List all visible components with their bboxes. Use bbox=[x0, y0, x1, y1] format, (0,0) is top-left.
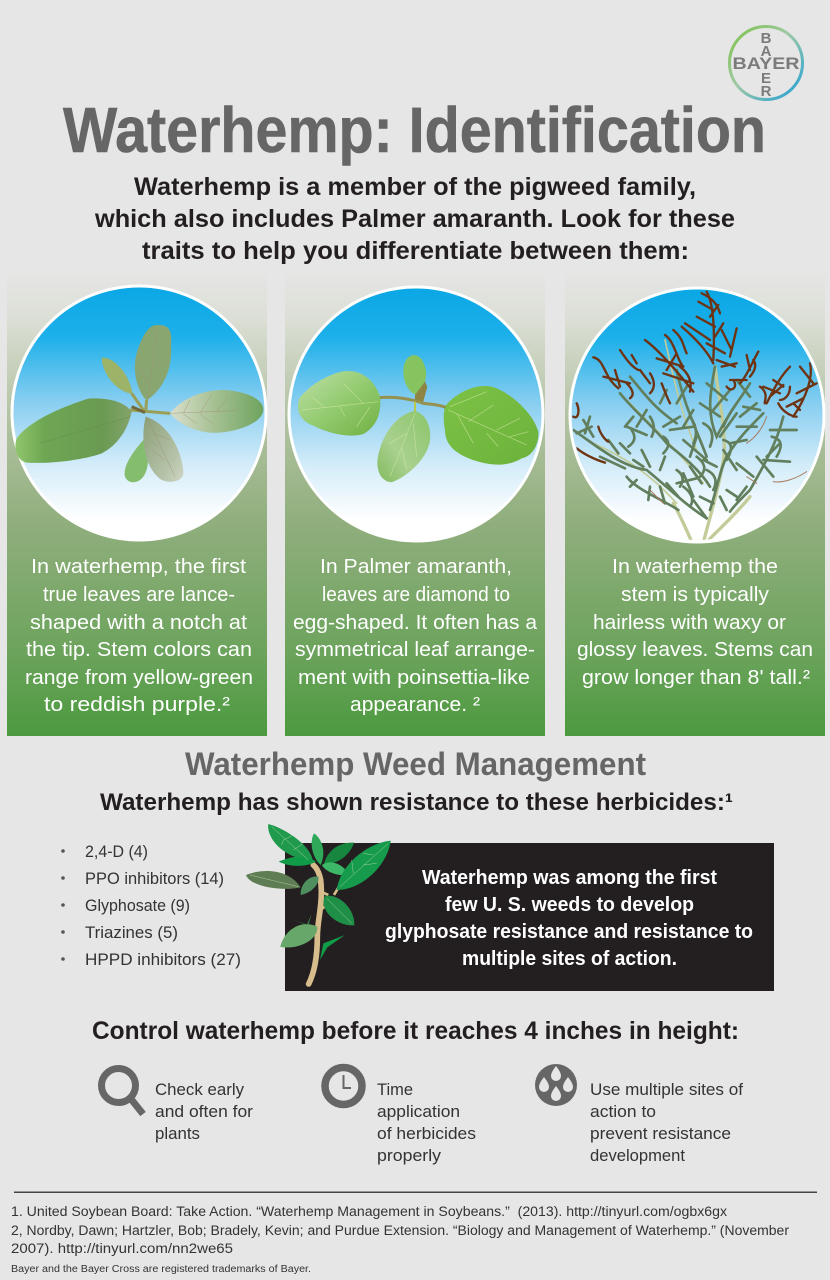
photo circle: lance-shaped seedling bbox=[12, 286, 266, 540]
tip: time application: Time bbox=[377, 1080, 413, 1099]
tip: multiple sites of action: Use multiple sites of bbox=[590, 1080, 743, 1099]
tip: time application: properly bbox=[377, 1146, 442, 1165]
tip: check early: plants bbox=[155, 1124, 200, 1143]
text block bbox=[25, 555, 253, 716]
callout: black box: few U. S. weeds to develop bbox=[445, 894, 694, 916]
callout: black box: multiple sites of action. bbox=[462, 948, 677, 970]
text block: to reddish purple.² bbox=[44, 693, 230, 716]
herbicide list: Glyphosate (9) bbox=[85, 897, 190, 915]
heading: weed management: Waterhemp Weed Management bbox=[185, 746, 646, 782]
text block: In waterhemp the bbox=[612, 555, 778, 578]
tip: multiple sites of action: development bbox=[590, 1146, 685, 1165]
tip: multiple sites of action: action to bbox=[590, 1102, 656, 1121]
text block: ment with poinsettia-like bbox=[298, 666, 530, 689]
callout: black box bbox=[285, 843, 774, 991]
herbicide list: PPO inhibitors (14) bbox=[85, 870, 224, 888]
tip: check early bbox=[102, 1068, 253, 1143]
text block bbox=[293, 555, 538, 716]
footnotes: 2007). http://tinyurl.com/nn2we65 bbox=[11, 1241, 233, 1256]
tip: time application: application bbox=[377, 1102, 460, 1121]
callout: black box: Waterhemp was among the first bbox=[422, 867, 717, 889]
footnotes: 2, Nordby, Dawn; Hartzler, Bob; Bradely, Kevin; and Purdue Extension. “Biology and Management of Waterhemp.” (November bbox=[11, 1223, 790, 1238]
herbicide list: Triazines (5) bbox=[85, 924, 178, 942]
logo: Bayer cross bbox=[730, 26, 802, 100]
panel: waterhemp stems bbox=[565, 270, 825, 736]
intro text: traits to help you differentiate between them: bbox=[142, 237, 689, 265]
photo circle: mature waterhemp plant bbox=[570, 288, 824, 542]
logo: Bayer cross: BAYER bbox=[732, 54, 800, 73]
herbicide list: HPPD inhibitors (27) bbox=[85, 951, 241, 969]
text block: glossy leaves. Stems can bbox=[577, 638, 813, 661]
intro text: which also includes Palmer amaranth. Look for these bbox=[94, 205, 735, 233]
icon: water drops bbox=[535, 1064, 577, 1106]
trademark note: Bayer and the Bayer Cross are registered trademarks of Bayer. bbox=[11, 1264, 311, 1275]
footnotes bbox=[11, 1204, 790, 1256]
tip: check early: and often for bbox=[155, 1102, 253, 1121]
logo: Bayer cross: R bbox=[761, 83, 772, 100]
logo: Bayer cross: A bbox=[761, 43, 772, 60]
logo: Bayer cross: B bbox=[761, 30, 772, 47]
text block: range from yellow-green bbox=[25, 666, 253, 689]
intro text bbox=[94, 173, 735, 265]
text block: In waterhemp, the first bbox=[31, 555, 246, 578]
herbicide list bbox=[61, 843, 241, 969]
text block: the tip. Stem colors can bbox=[26, 638, 252, 661]
footnotes: 1. United Soybean Board: Take Action. “Waterhemp Management in Soybeans.” (2013). http://tinyurl.com/ogbx6gx bbox=[11, 1204, 727, 1219]
text block: grow longer than 8' tall.² bbox=[582, 666, 810, 689]
tip: time application: of herbicides bbox=[377, 1124, 476, 1143]
text block bbox=[577, 555, 813, 689]
icon: clock bbox=[325, 1068, 362, 1104]
subheading: resistance: Waterhemp has shown resistance to these herbicides:¹ bbox=[100, 789, 733, 816]
herbicide list: 2,4-D (4) bbox=[85, 843, 148, 861]
intro text: Waterhemp is a member of the pigweed family, bbox=[134, 173, 696, 201]
text block: leaves are diamond to bbox=[322, 583, 510, 606]
title: Waterhemp: Identification bbox=[63, 94, 766, 166]
text block: symmetrical leaf arrange- bbox=[295, 638, 535, 661]
logo: Bayer cross: E bbox=[761, 70, 771, 87]
panel: waterhemp first leaves bbox=[7, 270, 267, 736]
text block: shaped with a notch at bbox=[30, 611, 247, 634]
heading: control: Control waterhemp before it reaches 4 inches in height: bbox=[92, 1017, 739, 1045]
callout: black box: glyphosate resistance and resistance to bbox=[385, 921, 753, 943]
tip: time application bbox=[325, 1068, 476, 1165]
icon: magnifying glass bbox=[102, 1068, 143, 1114]
text block: stem is typically bbox=[621, 583, 770, 606]
text block: hairless with waxy or bbox=[593, 611, 786, 634]
tip: check early: Check early bbox=[155, 1080, 244, 1099]
text block: In Palmer amaranth, bbox=[320, 555, 512, 578]
icon: waterhemp plant sprig bbox=[246, 824, 391, 984]
photo circle: diamond-shaped seedling bbox=[289, 287, 543, 541]
tip: multiple sites of action bbox=[535, 1064, 743, 1165]
text block: appearance. ² bbox=[350, 693, 480, 716]
panel: Palmer amaranth leaves bbox=[285, 270, 545, 736]
tip: multiple sites of action: prevent resistance bbox=[590, 1124, 731, 1143]
text block: egg-shaped. It often has a bbox=[293, 611, 538, 634]
text block: true leaves are lance- bbox=[43, 583, 235, 606]
